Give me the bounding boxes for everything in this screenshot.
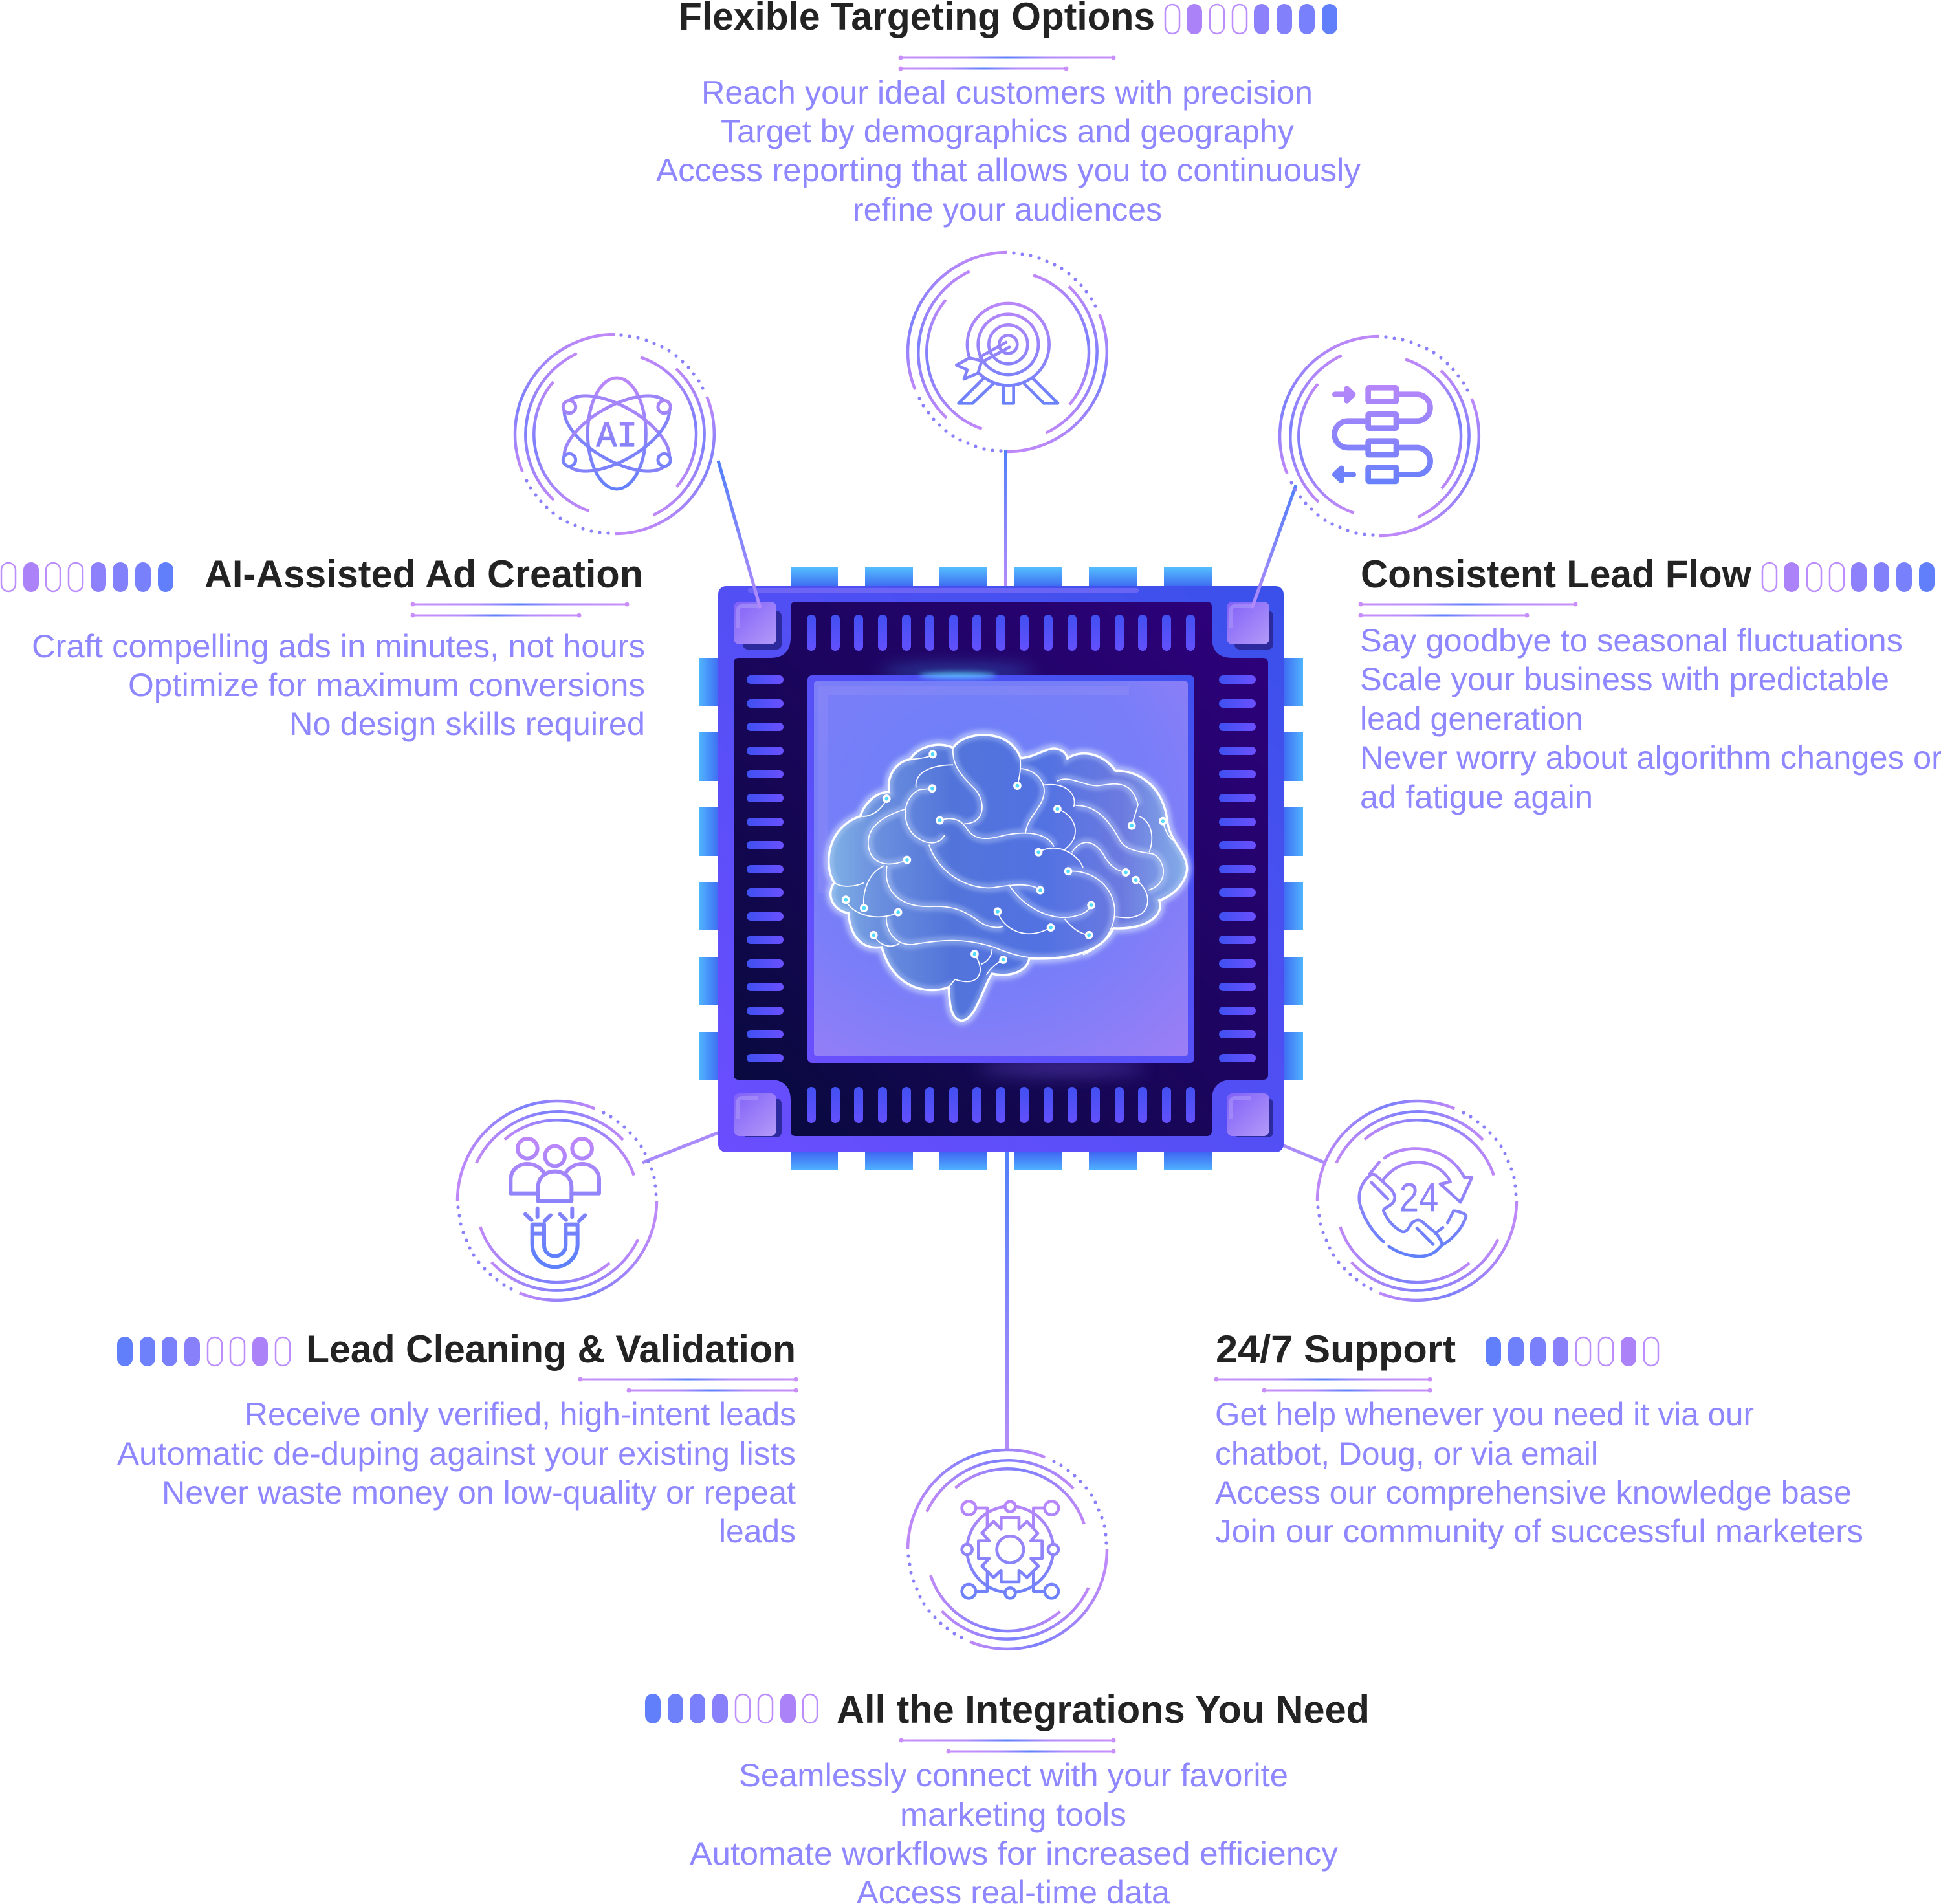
flow glyph — [1335, 388, 1431, 481]
description — [1215, 1396, 1863, 1549]
description: chatbot, Doug, or via email — [1215, 1436, 1598, 1472]
rating pills — [117, 1337, 290, 1366]
icon: integrations gear — [906, 1450, 1108, 1649]
corner pads — [734, 602, 1273, 1137]
divider — [898, 56, 1115, 71]
chip body — [718, 586, 1284, 1152]
panel: Flexible Targeting Options — [656, 0, 1361, 228]
screen glow — [880, 667, 1145, 1073]
description — [690, 1757, 1338, 1904]
connector: lead cleaning to chip — [642, 1132, 719, 1163]
description: lead generation — [1360, 701, 1583, 737]
description: Target by demographics and geography — [721, 113, 1294, 149]
description — [656, 74, 1361, 228]
description: Receive only verified, high-intent leads — [245, 1396, 796, 1432]
chip dark substrate — [734, 602, 1268, 1136]
panel: 24/7 Support — [1214, 1328, 1863, 1549]
description — [1360, 622, 1941, 815]
divider — [410, 602, 629, 617]
processor chip — [699, 567, 1303, 1170]
target glyph — [956, 303, 1058, 403]
divider — [1359, 602, 1577, 617]
gear glyph — [962, 1501, 1058, 1598]
phone glyph: 24 — [1399, 1176, 1438, 1221]
slots left — [747, 675, 784, 1062]
phone glyph — [1359, 1149, 1472, 1256]
description: Join our community of successful marketers — [1215, 1513, 1863, 1549]
icon: AI atom — [515, 333, 714, 535]
slots right — [1219, 675, 1256, 1062]
description — [32, 628, 645, 742]
rating pills — [1, 562, 173, 592]
chip pins — [699, 567, 1303, 1170]
description: Automate workflows for increased efficiency — [690, 1835, 1338, 1872]
connector: lead flow icon to chip — [1252, 485, 1296, 608]
connector: AI icon to chip — [718, 461, 760, 608]
connector: target to chip — [1004, 450, 1007, 586]
icon: 24/7 phone — [1316, 1101, 1518, 1300]
description: Access our comprehensive knowledge base — [1215, 1474, 1852, 1511]
heading: Lead Cleaning & Validation — [306, 1328, 796, 1371]
connector: support to chip — [1282, 1145, 1324, 1163]
divider — [1214, 1377, 1432, 1392]
panel: Consistent Lead Flow — [1359, 553, 1941, 815]
description: marketing tools — [900, 1797, 1126, 1833]
icon: target — [908, 251, 1107, 453]
icon: lead magnet — [456, 1101, 658, 1300]
divider — [578, 1377, 798, 1392]
description: Access reporting that allows you to continuously — [656, 152, 1361, 188]
heading: AI-Assisted Ad Creation — [204, 553, 643, 596]
connector: bottom vertical line to integrations — [1005, 1152, 1009, 1449]
description: Seamlessly connect with your favorite — [739, 1757, 1288, 1793]
description: Say goodbye to seasonal fluctuations — [1360, 622, 1903, 659]
description — [117, 1396, 796, 1549]
description: Never waste money on low-quality or repeat — [162, 1474, 796, 1511]
heading: 24/7 Support — [1216, 1328, 1456, 1371]
description: Never worry about algorithm changes or — [1360, 739, 1941, 776]
rating pills — [645, 1694, 817, 1723]
magnet glyph — [510, 1139, 599, 1267]
heading: All the Integrations You Need — [837, 1688, 1370, 1731]
heading: Consistent Lead Flow — [1361, 553, 1751, 596]
description: Reach your ideal customers with precision — [701, 74, 1313, 111]
description: leads — [719, 1513, 796, 1549]
atom glyph — [553, 378, 681, 489]
rating pills — [1762, 562, 1935, 592]
panel: Lead Cleaning & Validation — [117, 1328, 798, 1549]
description: refine your audiences — [853, 191, 1162, 228]
description: Optimize for maximum conversions — [128, 667, 645, 703]
description: Scale your business with predictable — [1360, 661, 1889, 697]
rating pills — [1486, 1337, 1658, 1366]
description: Craft compelling ads in minutes, not hours — [32, 628, 645, 664]
description: ad fatigue again — [1360, 779, 1593, 815]
divider — [899, 1738, 1115, 1753]
slots top — [807, 615, 1195, 651]
icon: lead flow — [1280, 335, 1479, 537]
description: Automatic de-duping against your existing lists — [117, 1436, 796, 1472]
brain illustration — [829, 735, 1187, 1020]
atom glyph: AI — [597, 417, 637, 458]
description: Get help whenever you need it via our — [1215, 1396, 1754, 1432]
description: No design skills required — [289, 706, 645, 742]
screen — [807, 675, 1194, 1063]
rating pills — [1165, 4, 1337, 34]
panel: All the Integrations You Need — [645, 1688, 1370, 1904]
slots bottom — [807, 1087, 1195, 1123]
panel: AI-Assisted Ad Creation — [1, 553, 645, 742]
